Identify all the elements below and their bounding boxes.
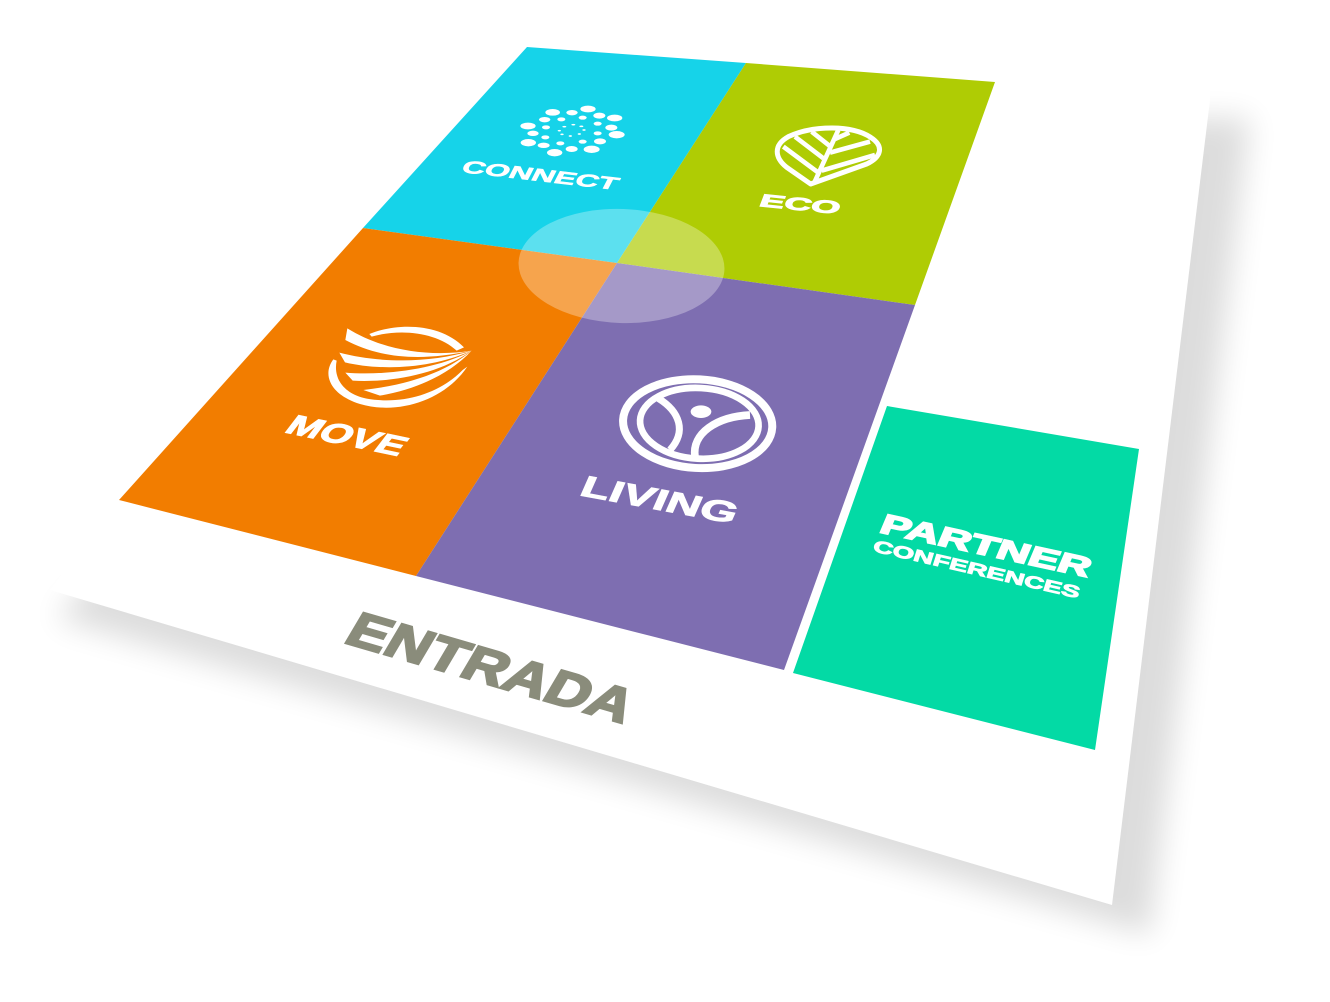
panel: connect — [363, 47, 746, 263]
label: eco: ECO — [756, 192, 844, 218]
label: entrada: ENTRADA — [336, 604, 646, 734]
icon: living figure — [621, 375, 775, 472]
central translucent ellipse — [517, 205, 726, 327]
icon: move wings — [328, 327, 472, 408]
white floor sheet — [50, 0, 1210, 905]
label: move: MOVE — [279, 409, 415, 462]
label: conferences: CONFERENCES — [871, 536, 1083, 602]
panel: move — [119, 228, 617, 576]
panel: eco — [617, 63, 995, 305]
label: living: LIVING — [575, 469, 744, 530]
panel: partner conferences — [793, 406, 1139, 750]
sheet shadow — [56, 118, 1250, 935]
icon: leaf — [777, 128, 880, 184]
label: connect: CONNECT — [458, 157, 623, 194]
label: partner: PARTNER — [875, 510, 1097, 584]
icon: connect dots — [520, 106, 625, 156]
panel: living — [416, 263, 915, 670]
